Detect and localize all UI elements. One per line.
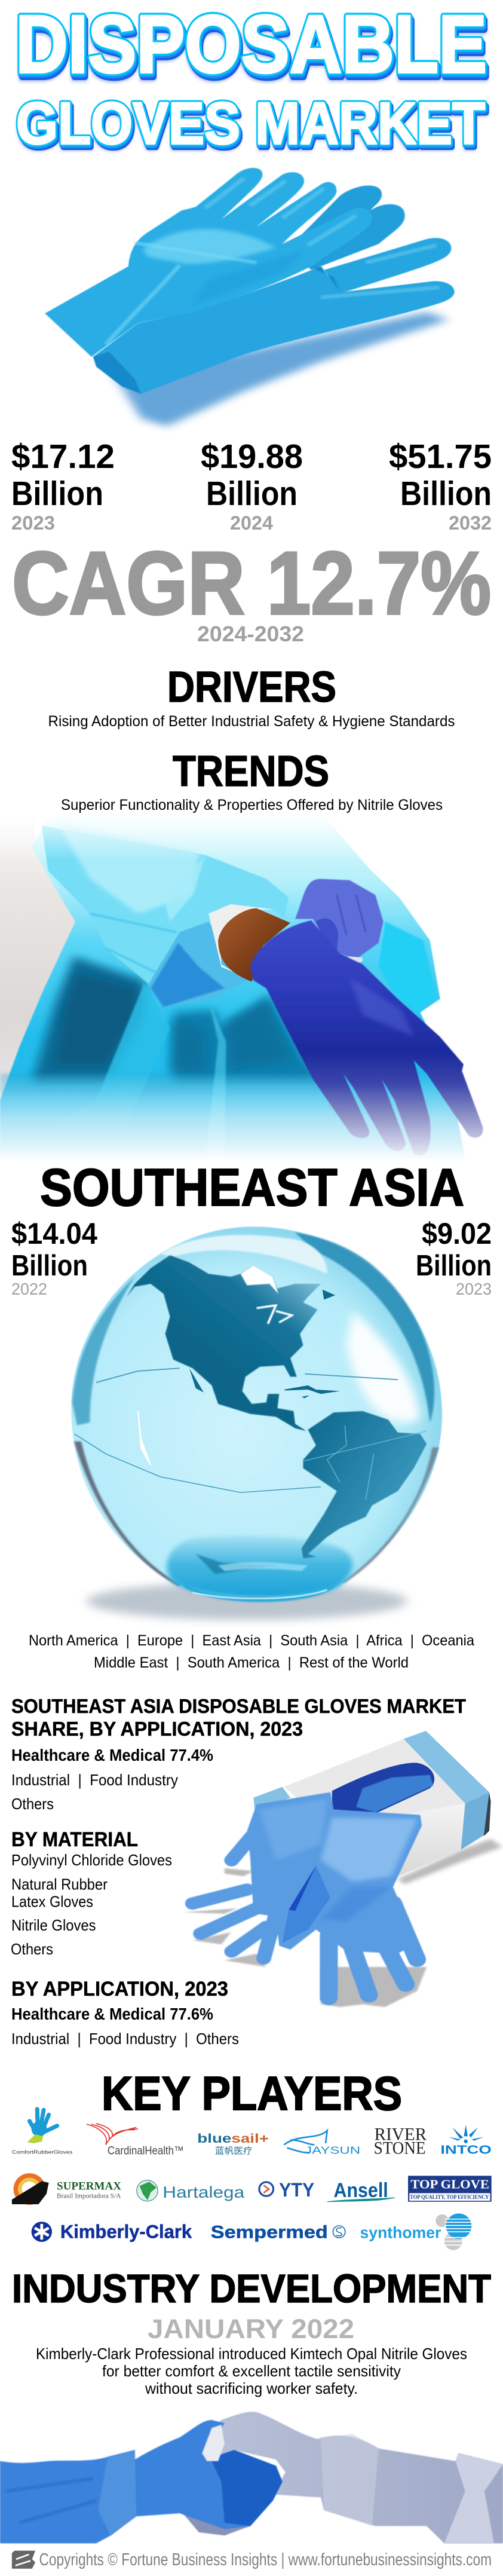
logo: Supermax: SUPERMAX <box>57 2180 121 2193</box>
logo: Sempermed: Sempermed <box>211 2223 328 2242</box>
development description: for better comfort & excellent tactile sensitivity <box>102 2362 401 2380</box>
stat: 2032: 2032 <box>449 512 492 534</box>
region list: Middle East | South America | Rest of the World <box>94 1654 409 1671</box>
title <box>16 0 489 161</box>
development description <box>36 2345 467 2397</box>
stat: 2023: 2023 <box>11 512 55 534</box>
logo: Cardinal Health <box>87 2124 184 2157</box>
by material list: Others <box>11 1940 53 1958</box>
logo: Bluesail: 蓝帆医疗 <box>215 2146 253 2156</box>
logo: Jaysun: JAYSUN <box>305 2144 360 2156</box>
footer logo <box>12 2551 35 2569</box>
trends <box>61 748 443 813</box>
logo: Cardinal Health: CardinalHealth™ <box>108 2145 184 2157</box>
Southeast Asia stat: 2022: Billion <box>11 1250 88 1282</box>
illustration: glass globe <box>71 1226 442 1620</box>
share by application list: Others <box>11 1795 54 1813</box>
logo: Synthomer: synthomer <box>360 2224 441 2242</box>
development description: Kimberly-Clark Professional introduced Kimtech Opal Nitrile Gloves <box>36 2345 467 2363</box>
Southeast Asia stat: 2023 <box>416 1217 492 1298</box>
heading: by material: BY MATERIAL <box>11 1828 138 1851</box>
logo: YTY: YTY <box>279 2179 314 2201</box>
heading: by application: BY APPLICATION, 2023 <box>11 1978 228 2000</box>
Southeast Asia stat: 2022: $14.04 <box>11 1217 97 1250</box>
date: JANUARY 2022 <box>148 2314 354 2344</box>
logo: Intco: INTCO <box>440 2143 492 2156</box>
heading: share by application <box>11 1695 466 1740</box>
illustration: handshake <box>0 2412 503 2543</box>
logo: YTY <box>259 2179 314 2201</box>
stat: 2024: 2024 <box>230 512 273 534</box>
by material list: Nitrile Gloves <box>11 1916 96 1934</box>
logo: Jaysun <box>284 2131 360 2156</box>
logo: Ansell: Ansell <box>333 2179 388 2202</box>
market size stats <box>11 438 492 534</box>
logo: River Stone: STONE <box>374 2138 426 2158</box>
Southeast Asia stat: 2023: 2023 <box>456 1280 492 1298</box>
stat: 2023: $17.12 <box>11 438 115 476</box>
illustration: blue gloves <box>45 168 455 426</box>
logo: Kimberly-Clark: Kimberly-Clark <box>60 2221 192 2242</box>
logo: Hartalega: Hartalega <box>162 2183 244 2201</box>
illustration: glove box with gloves <box>183 1731 502 2007</box>
logo: Supermax <box>12 2173 121 2205</box>
logo: Supermax: Brasil Importadora S/A <box>57 2192 121 2199</box>
Southeast Asia stat: 2023: Billion <box>416 1250 492 1282</box>
share by application list: Industrial | Food Industry <box>11 1771 178 1789</box>
key player logos <box>12 2109 492 2250</box>
Southeast Asia stat: 2022 <box>11 1217 97 1298</box>
stat: 2024: Billion <box>206 475 297 513</box>
heading: key players: KEY PLAYERS <box>102 2067 402 2120</box>
by application list: Industrial | Food Industry | Others <box>11 2030 239 2048</box>
Southeast Asia stat: 2023: $9.02 <box>422 1217 492 1250</box>
trends: Superior Functionality & Properties Offered by Nitrile Gloves <box>61 797 443 813</box>
by application list: Healthcare & Medical 77.6% <box>11 2005 213 2023</box>
heading: Southeast Asia: SOUTHEAST ASIA <box>40 1158 464 1217</box>
logo: Intco <box>440 2125 492 2156</box>
logo: Hartalega <box>137 2180 244 2201</box>
stat: 2023 <box>11 438 115 534</box>
share by application list <box>11 1746 213 1813</box>
by material list: Natural Rubber <box>11 1876 108 1893</box>
share by application list: Healthcare & Medical 77.4% <box>11 1746 213 1764</box>
logo: Top Glove <box>408 2176 492 2202</box>
segmentation text <box>11 1695 466 2048</box>
stat: 2024 <box>201 438 303 534</box>
logo: Comfort Rubber Gloves <box>12 2109 72 2155</box>
logo: Comfort Rubber Gloves: ComfortRubberGloves <box>12 2149 72 2155</box>
footer <box>12 2550 492 2569</box>
logo: Synthomer <box>360 2213 473 2250</box>
logo: River Stone <box>374 2125 427 2158</box>
logo: River Stone: RIVER <box>375 2125 427 2144</box>
heading: share by application: SHARE, BY APPLICATION, 2023 <box>11 1718 303 1740</box>
industry development <box>12 2266 491 2397</box>
glove body and fingers <box>192 1792 422 1997</box>
stat: 2032: Billion <box>400 475 492 513</box>
region list <box>29 1632 474 1671</box>
logo: Bluesail: blue sail+ <box>197 2131 269 2146</box>
by material list: Latex Gloves <box>11 1892 93 1910</box>
heading: share by application: SOUTHEAST ASIA DISPOSABLE GLOVES MARKET <box>11 1695 466 1717</box>
photo: person in gown pulling on a nitrile glove <box>0 807 503 1170</box>
CAGR: 2024-2032 <box>197 622 304 646</box>
stat: 2023: Billion <box>11 475 103 513</box>
by material list <box>11 1851 172 1958</box>
trends: TRENDS <box>173 748 329 796</box>
Southeast Asia stat: 2022: 2022 <box>11 1280 47 1298</box>
logo: Top Glove: TOP GLOVE <box>410 2177 489 2192</box>
drivers <box>48 663 455 730</box>
region list: North America | Europe | East Asia | South Asia | Africa | Oceania <box>29 1632 474 1649</box>
logo: Bluesail <box>197 2131 269 2156</box>
drivers: Rising Adoption of Better Industrial Safety & Hygiene Standards <box>48 713 455 730</box>
by material list: Polyvinyl Chloride Gloves <box>11 1851 172 1869</box>
stat: 2032: $51.75 <box>389 438 492 476</box>
logo: Top Glove: TOP QUALITY, TOP EFFICIENCY <box>410 2194 489 2200</box>
development description: without sacrificing worker safety. <box>145 2379 358 2397</box>
stat: 2032 <box>389 438 492 534</box>
stat: 2024: $19.88 <box>201 438 303 476</box>
drivers: DRIVERS <box>167 663 336 711</box>
by application list <box>11 2005 239 2048</box>
